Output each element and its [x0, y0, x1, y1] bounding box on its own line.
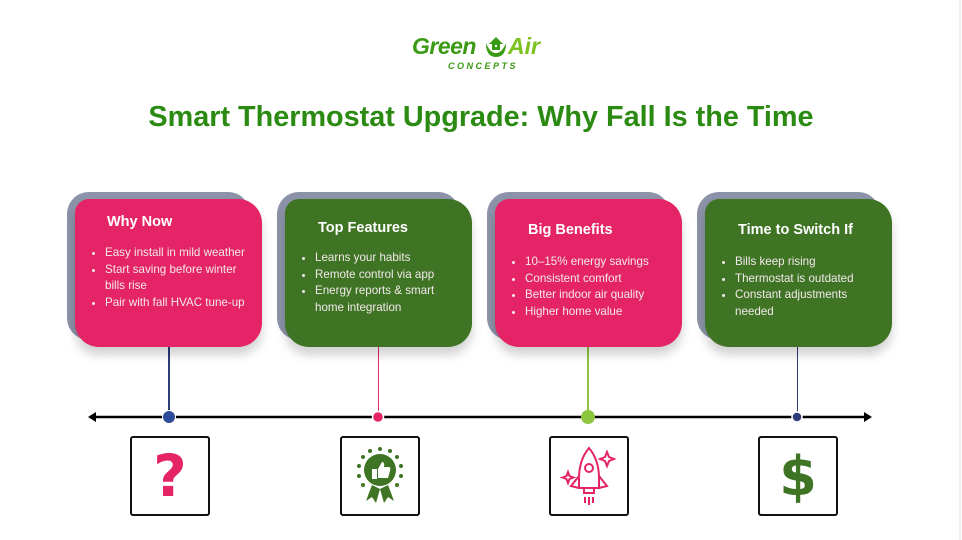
card: Big Benefits: Big Benefits: [528, 222, 613, 238]
card: Big Benefits: Better indoor air quality: [525, 288, 644, 301]
card: Why Now: Easy install in mild weather: [105, 246, 245, 259]
card: Top Features: Energy reports & smart home integration: [315, 284, 434, 314]
icon: leaf house: [486, 37, 506, 57]
card: Why Now: Why Now: [107, 214, 172, 230]
card: Big Benefits: 10–15% energy savings: [525, 255, 649, 268]
card: Why Now: Pair with fall HVAC tune-up: [105, 296, 245, 308]
card: Top Features: [277, 192, 476, 359]
logo: Air: [508, 33, 540, 59]
card: Big Benefits: Consistent comfort: [525, 272, 622, 284]
card: Big Benefits: [487, 192, 686, 359]
logo: Green: [412, 33, 476, 59]
card: Top Features: Top Features: [318, 220, 408, 236]
card: Top Features: Remote control via app: [315, 268, 434, 280]
card: Why Now: Start saving before winter bills rise: [105, 262, 236, 292]
card: Time to Switch If: Bills keep rising: [735, 255, 816, 268]
icon: rocket: [549, 436, 629, 516]
icon: dollar: [758, 436, 838, 516]
icon: dollar: $: [779, 444, 817, 508]
card: Time to Switch If: Constant adjustments needed: [735, 288, 847, 318]
right border line: [959, 0, 961, 540]
connectors: [168, 345, 170, 417]
card: Time to Switch If: [697, 192, 896, 359]
card: Time to Switch If: Time to Switch If: [738, 222, 853, 238]
card: Why Now: [67, 192, 266, 359]
card: Big Benefits: Higher home value: [525, 304, 622, 318]
icon: question mark: ?: [153, 442, 187, 510]
logo: CONCEPTS: [448, 61, 518, 71]
card: Top Features: Learns your habits: [315, 251, 410, 264]
icon: question mark: [130, 436, 210, 516]
title: Smart Thermostat Upgrade: Why Fall Is the Time: [148, 101, 814, 133]
timeline: [88, 410, 872, 424]
icon: award thumbs up: [340, 436, 420, 516]
logo: [412, 33, 541, 71]
card: Time to Switch If: Thermostat is outdated: [735, 272, 854, 284]
